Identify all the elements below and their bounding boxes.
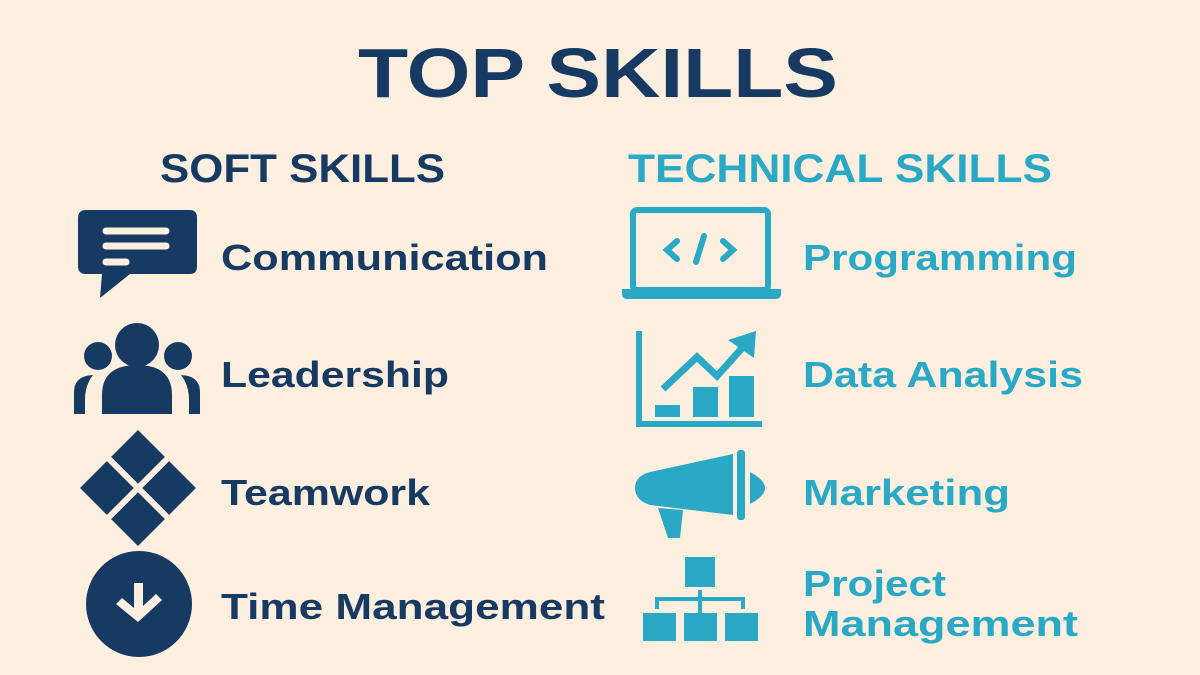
technical skill: marketing [635,450,1010,538]
soft skill: leadership [74,323,449,414]
heading: technical skills: TECHNICAL SKILLS [628,147,1052,191]
technical skill: project management [643,557,1078,644]
technical skill: marketing: Marketing [803,472,1010,513]
icon: clock [86,551,192,657]
icon: people [74,323,200,414]
soft skill: communication [78,210,548,298]
soft skill: communication: Communication [221,237,548,278]
technical skill: programming: Programming [803,237,1077,278]
technical skill: project management: Management [803,603,1078,644]
icon: speech bubble [78,210,197,298]
title: TOP SKILLS [358,34,838,112]
technical skill: data analysis [636,331,1083,427]
soft skill: teamwork: Teamwork [221,472,431,513]
technical skill: programming [622,210,1077,299]
icon: growth chart [636,331,762,427]
soft skill: time management [86,551,605,657]
icon: megaphone [635,450,765,538]
soft skill: leadership: Leadership [221,354,449,395]
soft skill: teamwork [80,430,431,546]
heading: soft skills: SOFT SKILLS [160,147,445,191]
technical skill: project management: Project [803,563,946,604]
technical skill: data analysis: Data Analysis [803,354,1083,395]
soft skill: time management: Time Management [221,586,605,627]
icon: org chart [643,557,758,641]
icon: interlocking hands [80,430,196,546]
icon: laptop code [622,210,781,299]
